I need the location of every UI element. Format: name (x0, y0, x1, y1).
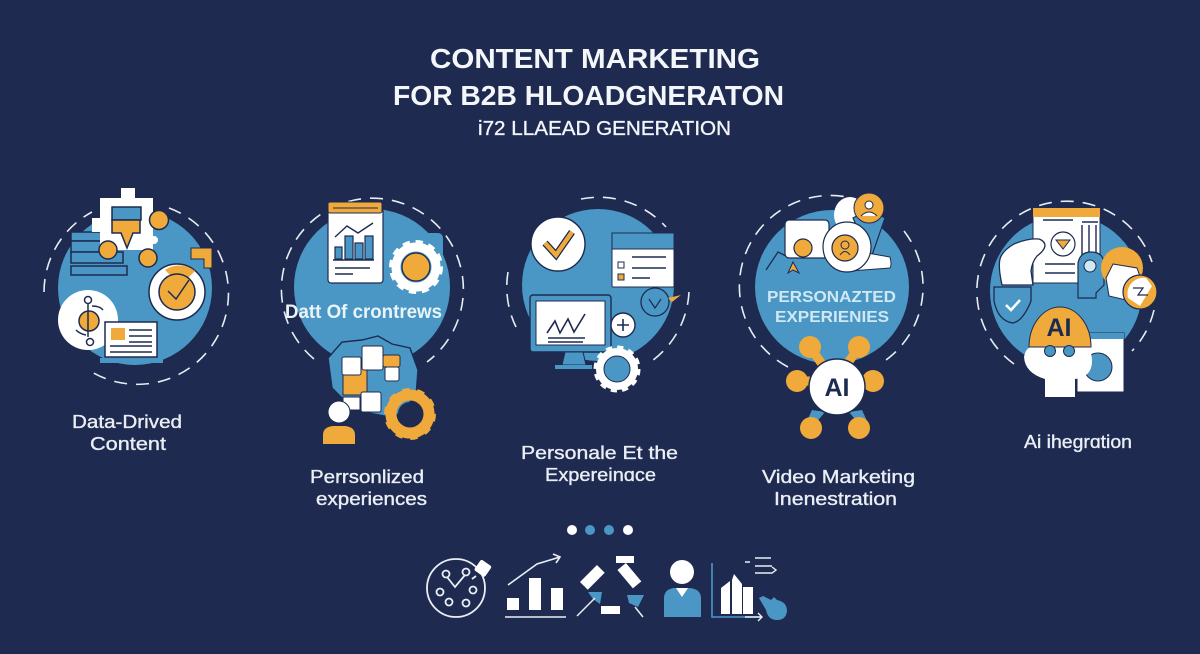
text: circle caption (767, 289, 896, 326)
label (310, 467, 427, 509)
label (72, 412, 182, 454)
icon: chart and hand (712, 558, 787, 621)
text: circle caption: PERSONAZTED (767, 289, 896, 306)
text: circle caption: Datt Of crontrews (285, 302, 442, 323)
label: Ai ihegrɑtion (1024, 432, 1132, 452)
icon: pin and profile badges (823, 193, 891, 272)
icon: figure and papers (1078, 247, 1157, 309)
icon: AI head (1024, 307, 1124, 397)
icon: target check (149, 248, 212, 320)
icon: white gear (392, 243, 440, 291)
icon: speech bubble gear (92, 188, 158, 250)
label: Video Marketing (762, 467, 915, 487)
icon: report (328, 202, 383, 283)
icon: process cycle (577, 556, 644, 617)
text: circle caption: EXPERIENIES (775, 309, 889, 326)
icon: node circle (58, 290, 118, 350)
icon: clock dial (427, 559, 492, 617)
icon: AI hub (786, 336, 884, 439)
title: CONTENT MARKETING (430, 43, 760, 74)
icon: person bust (664, 560, 701, 617)
icon: hand and cuff (994, 239, 1045, 323)
label (521, 443, 678, 485)
panel: personal experience (507, 197, 689, 485)
title: FOR B2B HLOADGNERATON (393, 80, 784, 111)
icon: browser window (612, 233, 674, 287)
icon: stacked layers (71, 232, 127, 275)
title: i72 LLAEAD GENERATION (478, 118, 731, 140)
label: Inenestration (774, 489, 897, 509)
icon: AI head: AI (1046, 314, 1072, 342)
icon: content window (1033, 208, 1100, 283)
label (762, 467, 915, 509)
panel: data-driven content (44, 188, 228, 454)
label: Perrsonlized (310, 467, 424, 487)
icon: certificate (766, 220, 829, 273)
icon: small orange badges (99, 210, 168, 267)
icon: monitor (530, 295, 611, 369)
icon: person (323, 401, 355, 444)
icon: AI hub: AI (824, 374, 850, 402)
label: Data-Drived (72, 412, 182, 432)
icon: small check badge (641, 288, 681, 316)
icon: check circle (531, 217, 585, 271)
label: experiences (316, 489, 427, 509)
pagination dots (567, 525, 633, 535)
label: Content (90, 434, 166, 454)
panel: personalized experiences (281, 198, 463, 509)
label: Personale Et the (521, 443, 678, 463)
icon: gear (596, 348, 638, 390)
icon: document (100, 322, 163, 363)
icon: orange gear (387, 391, 433, 437)
icon: growth bars (505, 554, 566, 617)
panel: video marketing (739, 193, 923, 509)
title (393, 43, 784, 140)
panel: AI integration (977, 201, 1157, 452)
icon: plus (611, 313, 635, 337)
label: Expereinɑce (545, 465, 656, 485)
icon: puzzle blob (328, 336, 418, 418)
